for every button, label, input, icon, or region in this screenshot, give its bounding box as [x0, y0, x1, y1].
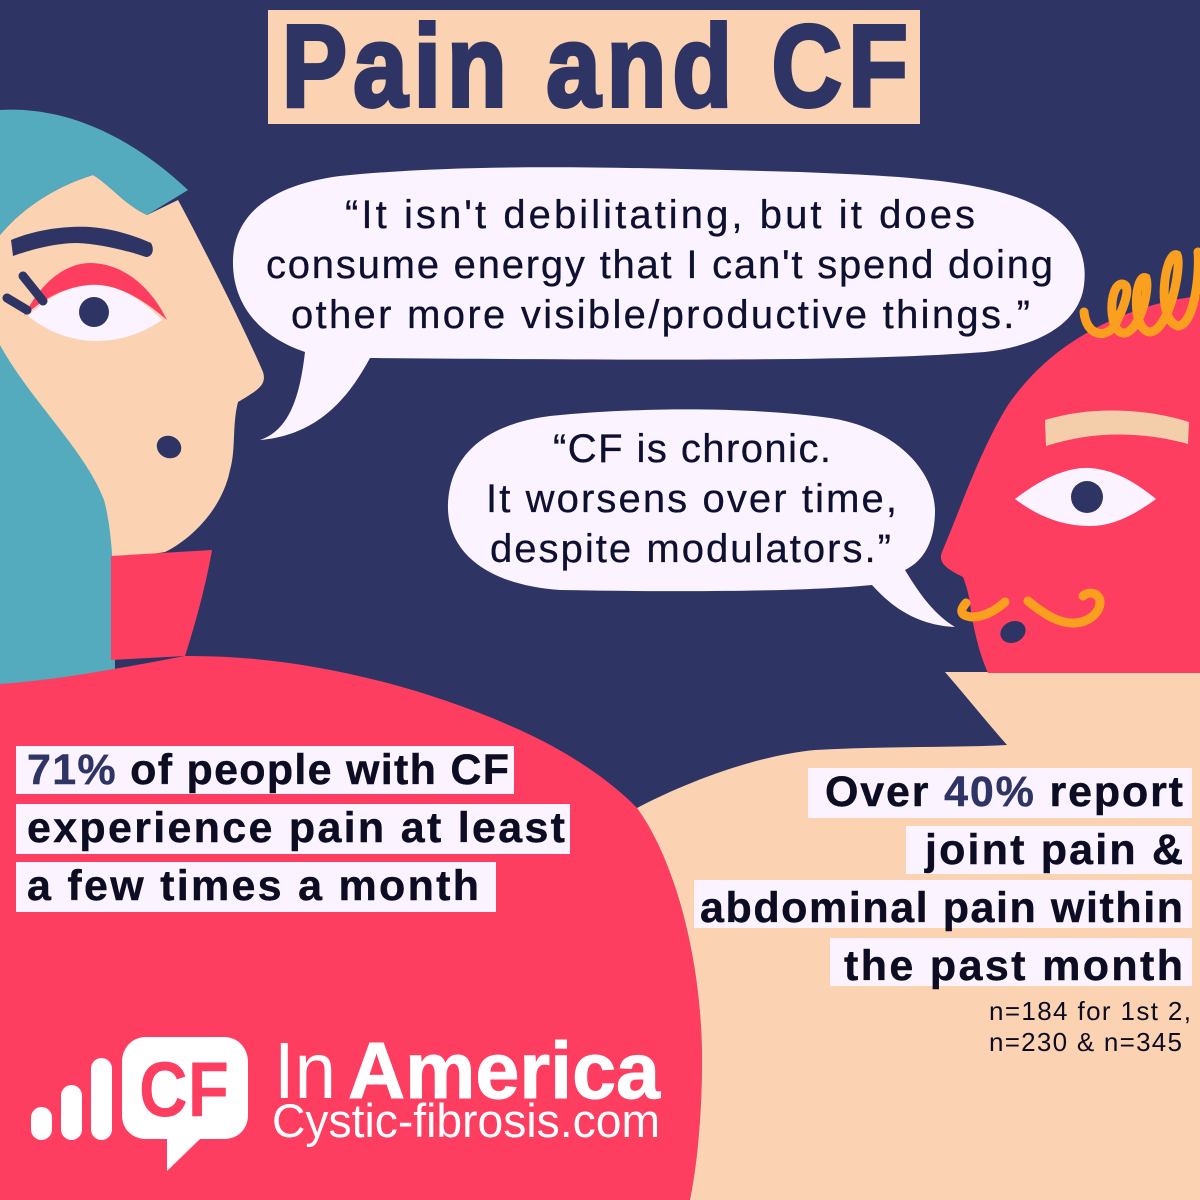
stat: over 40 percent [694, 768, 1192, 990]
logo CF letters: CF [139, 1045, 229, 1133]
stat: over 40 percent: the past month [844, 942, 1183, 990]
woman eye [28, 285, 162, 341]
stat: 71 percent [16, 746, 570, 912]
quote text 1 [266, 193, 1053, 337]
title: Pain and CF [282, 1, 908, 131]
man peach body [637, 672, 1200, 1200]
man mouth [997, 617, 1029, 647]
stat: over 40 percent: Over 40% report [825, 768, 1183, 816]
sample size note [989, 996, 1191, 1057]
man moustache [962, 593, 1100, 623]
speech bubble: man quote [448, 409, 955, 627]
woman eyelashes [7, 276, 43, 310]
woman face [0, 175, 264, 560]
woman eye makeup [24, 263, 167, 320]
stat: over 40 percent: joint pain & [924, 826, 1183, 874]
logo: CF In America: America [348, 1026, 660, 1115]
man eye [1015, 468, 1156, 526]
stat: 71 percent: a few times a month [27, 862, 479, 910]
logo signal bars [31, 1058, 112, 1140]
figure: woman with teal hair [0, 110, 702, 1200]
quote text 2: “CF is chronic. [553, 427, 831, 471]
quote text 1: “It isn't debilitating, but it does [345, 193, 975, 237]
woman collar and body [0, 550, 702, 1200]
stat: over 40 percent: abdominal pain within [700, 884, 1183, 932]
speech bubble: woman quote [233, 167, 1085, 440]
figure: man with red face [637, 252, 1200, 1200]
woman eyebrow [11, 227, 153, 257]
quote text 2: It worsens over time, [486, 477, 897, 521]
stat: 71 percent: 71% of people with CF [27, 746, 509, 794]
logo wordmark: In [274, 1026, 336, 1115]
woman pupil [79, 297, 109, 327]
man pupil [1071, 481, 1103, 513]
logo: CF In America [31, 1026, 660, 1171]
stat: 71 percent: experience pain at least [27, 804, 565, 852]
logo website: Cystic-fibrosis.com [272, 1094, 660, 1147]
sample size note: n=184 for 1st 2, [989, 996, 1191, 1026]
logo speech bubble [122, 1037, 248, 1171]
woman hair [0, 110, 188, 690]
woman mouth [153, 432, 185, 462]
quote text 1: other more visible/productive things.” [291, 293, 1030, 337]
man face [941, 296, 1200, 673]
quote text 2: despite modulators.” [490, 527, 891, 571]
quote text 1: consume energy that I can't spend doing [266, 243, 1053, 287]
man eyebrow [1045, 410, 1189, 446]
man hair curls [1084, 252, 1198, 334]
quote text 2 [486, 427, 897, 571]
sample size note: n=230 & n=345 [989, 1027, 1182, 1057]
